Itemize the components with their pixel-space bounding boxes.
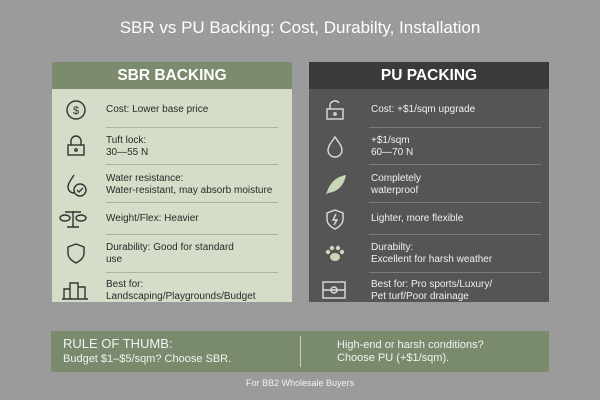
PU header: PU PACKING: [381, 67, 477, 84]
rule left text: Budget $1–$5/sqm? Choose SBR.: [63, 353, 231, 365]
row: tuft: [327, 135, 413, 158]
row: cost: [326, 100, 475, 120]
rule right text: Choose PU (+$1/sqm).: [337, 352, 449, 364]
rule left text: RULE OF THUMB:: [63, 336, 173, 351]
panel: SBR: Durability: Good for standard: [106, 242, 234, 253]
row: lighter: Lighter, more flexible: [371, 213, 463, 224]
row: cost: Cost: Lower base price: [106, 104, 208, 115]
panel: PU: Pet turf/Poor drainage: [371, 290, 469, 302]
rule right text: High-end or harsh conditions?: [337, 339, 484, 351]
SBR header: [52, 62, 292, 89]
row: tuft lock: [67, 135, 148, 158]
panel: PU: Excellent for harsh weather: [371, 254, 492, 264]
panel: SBR: [52, 62, 292, 302]
SBR header: SBR BACKING: [117, 67, 227, 84]
row: waterproof: [326, 173, 421, 196]
panel: SBR: Tuft lock:: [106, 135, 146, 146]
row: cost: [66, 100, 208, 120]
panel: SBR: Water resistance:: [106, 173, 183, 184]
panel: PU: Durabilty:: [371, 242, 413, 253]
panel: PU: Best for: Pro sports/Luxury/: [371, 279, 492, 290]
PU header: [309, 62, 549, 89]
rule right text: [337, 339, 484, 364]
row: cost: $: [73, 105, 79, 117]
title: SBR vs PU Backing: Cost, Durabilty, Installation: [120, 18, 480, 37]
panel: PU: 60—70 N: [371, 146, 413, 158]
row: cost: Cost: +$1/sqm upgrade: [371, 104, 475, 115]
row: best for: [62, 279, 256, 302]
row: durability: [326, 242, 492, 264]
row: water: [67, 173, 272, 197]
panel: SBR: use: [106, 254, 122, 264]
footer: For BB2 Wholesale Buyers: [246, 378, 354, 388]
panel: PU: +$1/sqm: [371, 135, 410, 146]
panel: PU: waterproof: [371, 184, 418, 196]
row: weight: [59, 211, 199, 228]
row: weight: Weight/Flex: Heavier: [106, 213, 199, 224]
panel: SBR: Landscaping/Playgrounds/Budget: [106, 290, 256, 302]
row: best for: [322, 279, 492, 302]
panel: SBR: Water-resistant, may absorb moisture: [106, 184, 272, 196]
rule of thumb box: [51, 331, 549, 372]
panel: PU: Completely: [371, 173, 421, 184]
panel: SBR: Best for:: [106, 279, 143, 290]
rule left text: [63, 336, 231, 365]
row: lighter: [326, 209, 463, 230]
panel: PU: [309, 62, 549, 302]
row: durability: [67, 242, 234, 264]
panel: SBR: 30—55 N: [106, 146, 148, 158]
